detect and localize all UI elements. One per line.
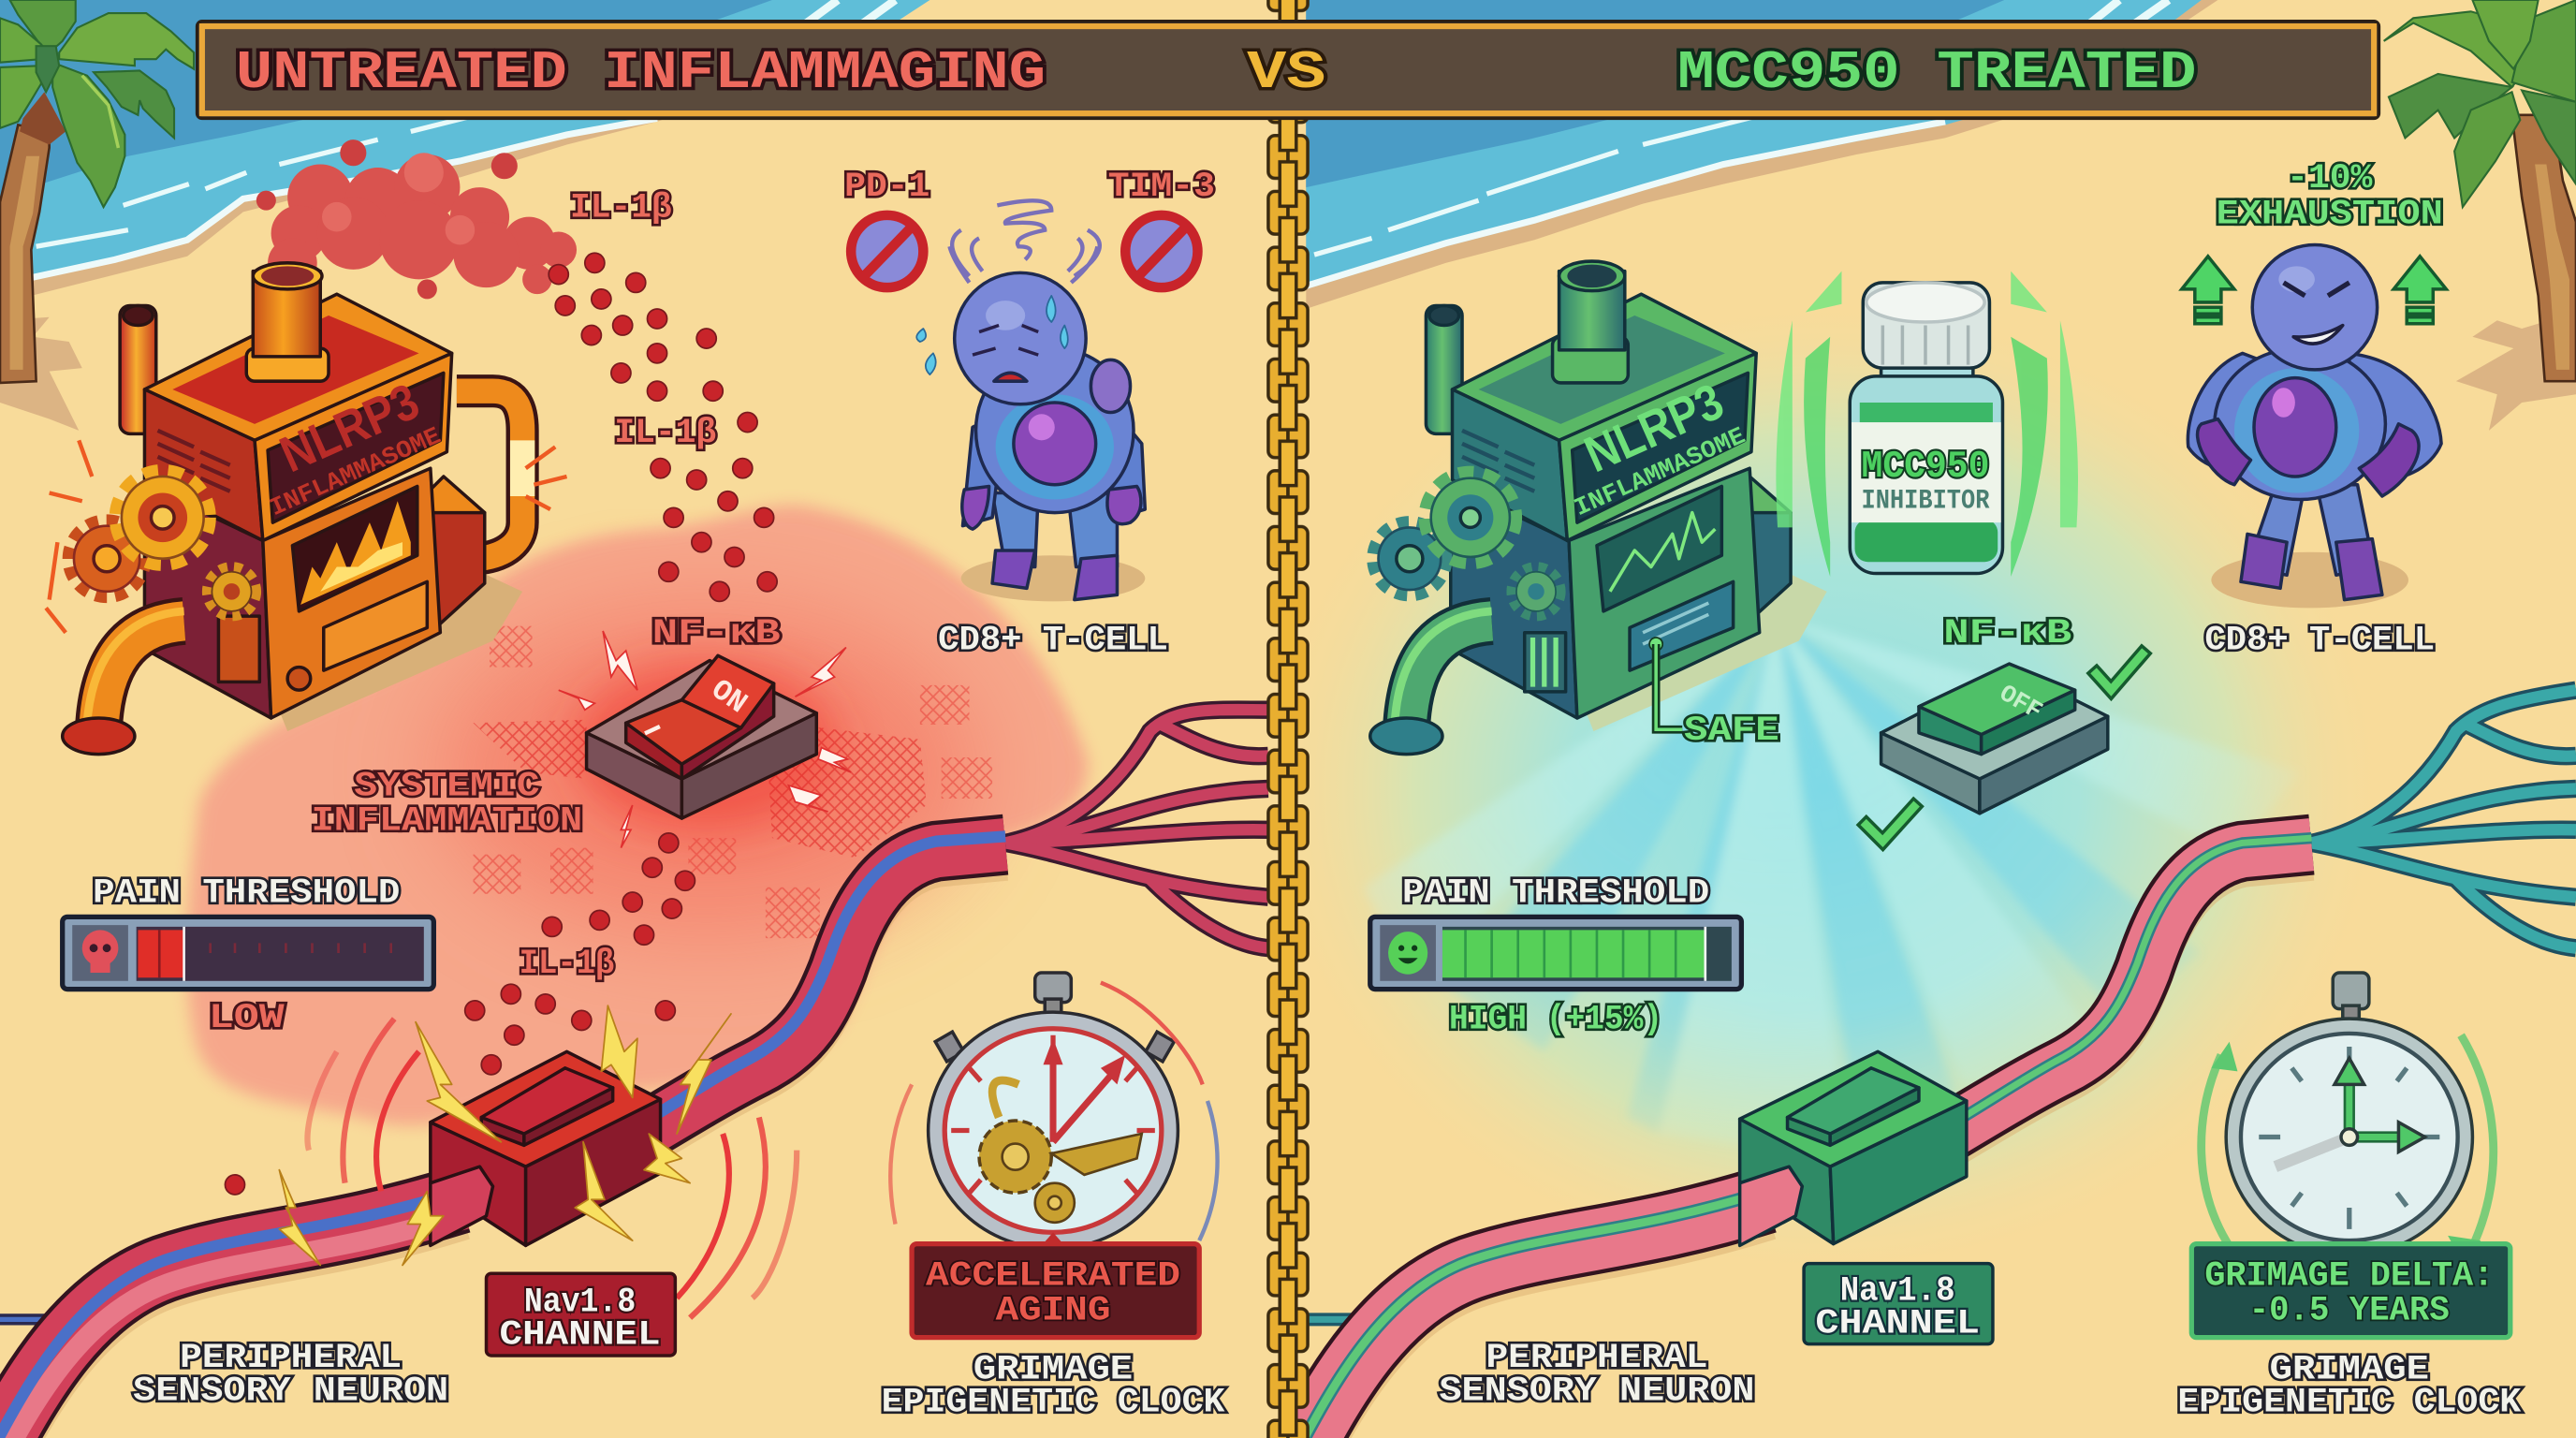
channel: Nav1.8 right	[1740, 1051, 1967, 1245]
machine: NLRP3 inflammasome treated	[1370, 261, 1827, 755]
smiling face	[2284, 283, 2349, 296]
IL-1β particles	[225, 253, 777, 1195]
label: peripheral sensory neuron right	[1439, 1339, 1754, 1411]
label: NF-κB on: NF-κB	[652, 614, 781, 653]
gears	[69, 472, 256, 616]
neuron: right	[1296, 690, 2576, 1438]
label: peripheral sensory neuron left: PERIPHERAL	[180, 1339, 402, 1378]
axon branches	[1005, 710, 1268, 948]
switch: NF-κB OFF	[1881, 664, 2108, 814]
channel: Nav1.8 left	[279, 1005, 797, 1318]
palm tree: left	[0, 0, 194, 431]
label: Nav1.8 channel left: CHANNEL	[500, 1316, 661, 1356]
ocean: right	[1306, 0, 2217, 309]
chimney	[246, 263, 329, 381]
label: systemic inflammation	[312, 767, 582, 841]
chimney	[1553, 261, 1628, 383]
icon: dizzy swirl	[949, 200, 1100, 283]
bar: pain threshold low	[63, 917, 433, 990]
label: pain threshold right: PAIN THRESHOLD	[1402, 874, 1709, 914]
sparks	[46, 440, 567, 633]
bottle label text: INHIBITOR	[1862, 484, 1990, 516]
label: PD-1: PD-1	[844, 168, 929, 207]
icon: TIM-3 blocked receptor	[1125, 215, 1197, 287]
label: IL-1β top: IL-1β	[570, 189, 672, 228]
callout: GrimAge delta: GRIMAGE DELTA:	[2204, 1256, 2494, 1296]
gears	[1373, 473, 1560, 616]
label: GrimAge clock left: EPIGENETIC CLOCK	[882, 1384, 1225, 1423]
icon: PD-1 blocked receptor	[851, 215, 923, 287]
chain divider	[1266, 0, 1310, 1438]
callout: accelerated aging	[912, 1232, 1199, 1338]
label: GrimAge clock left: GRIMAGE	[973, 1351, 1133, 1390]
pipe: lower elbow	[87, 611, 184, 731]
label: exhaustion reduction: -10%	[2287, 159, 2373, 198]
vibration arcs	[308, 1019, 797, 1318]
callout: accelerated aging: AGING	[996, 1291, 1110, 1330]
clock hands	[1053, 1051, 1117, 1142]
label: exhaustion reduction: EXHAUSTION	[2217, 196, 2443, 235]
rotation arrows	[2202, 1035, 2494, 1257]
label: GrimAge clock right: EPIGENETIC CLOCK	[2177, 1384, 2522, 1423]
label: GrimAge clock right	[2177, 1351, 2522, 1423]
switch: NF-κB ON	[587, 655, 816, 818]
bottle: MCC950 inhibitor	[1850, 283, 2002, 574]
title: untreated: UNTREATED INFLAMMAGING	[236, 43, 1046, 104]
label: TIM-3: TIM-3	[1108, 168, 1215, 207]
switch label: ON: ON	[705, 674, 753, 721]
label: Nav1.8 channel right	[1804, 1264, 1993, 1344]
palm tree: right	[2384, 0, 2576, 431]
SAFE callout	[1649, 638, 1779, 751]
label: CD8+ T-cell left: CD8+ T-CELL	[938, 621, 1168, 660]
panel: systemic inflammation haze	[186, 506, 1088, 1125]
display: NLRP3 label: NLRP3	[1576, 373, 1732, 483]
pipe: right coupling	[457, 391, 522, 559]
label: peripheral sensory neuron right: SENSORY NEURON	[1439, 1372, 1754, 1411]
label: exhaustion reduction	[2217, 159, 2443, 235]
SAFE callout: SAFE	[1684, 712, 1779, 751]
pipe: lower elbow	[1395, 611, 1492, 731]
title: VS: VS	[1247, 43, 1325, 104]
icon: check marks	[1866, 654, 2143, 842]
icon: strength arrows	[2182, 257, 2446, 324]
smoke cloud: IL-1β plume	[256, 139, 577, 299]
label: GrimAge clock right: GRIMAGE	[2270, 1351, 2429, 1390]
clock hands	[2349, 1071, 2408, 1137]
title banner	[198, 22, 2378, 118]
label: peripheral sensory neuron left	[133, 1339, 448, 1411]
neuron stub into box	[1740, 1167, 1802, 1245]
neuron stub into box	[431, 1167, 493, 1245]
icon: smile face	[1388, 932, 1427, 975]
ocean: left	[0, 0, 929, 320]
vents	[157, 431, 230, 492]
callout: accelerated aging: ACCELERATED	[926, 1256, 1180, 1296]
display: NLRP3 label: INFLAMMASOME	[266, 422, 446, 522]
crosshatch patches	[473, 626, 992, 938]
switch label: OFF: OFF	[1995, 680, 2047, 726]
side box	[431, 490, 485, 633]
callout: GrimAge delta: -0.5 YEARS	[2249, 1291, 2450, 1330]
label: IL-1β lower: IL-1β	[520, 945, 614, 984]
label: Nav1.8 channel right: CHANNEL	[1815, 1304, 1980, 1343]
clock: accelerated aging	[890, 973, 1218, 1249]
sweat drops	[916, 296, 1068, 374]
machine: NLRP3 inflammasome untreated	[46, 263, 567, 755]
label: CD8+ T-cell right: CD8+ T-CELL	[2204, 621, 2435, 660]
icon: skull	[82, 930, 118, 973]
label: peripheral sensory neuron right: PERIPHERAL	[1486, 1339, 1707, 1378]
clock gears	[979, 1080, 1142, 1223]
label: Nav1.8 channel right: Nav1.8	[1840, 1271, 1955, 1311]
label: systemic inflammation: INFLAMMATION	[312, 801, 582, 841]
T-cell: strong	[2188, 245, 2441, 608]
label: GrimAge clock left	[882, 1351, 1225, 1423]
label: LOW: LOW	[209, 999, 285, 1038]
bar: pain threshold high	[1370, 917, 1741, 990]
icon: MCC950 shield brackets	[1776, 271, 2078, 577]
monitor: heart trace	[1597, 487, 1721, 611]
bottle label text	[1862, 446, 1990, 516]
label: Nav1.8 channel left	[487, 1273, 675, 1356]
title: treated: MCC950 TREATED	[1677, 43, 2197, 104]
pipe: thin left	[120, 305, 156, 433]
lightning around switch	[559, 631, 851, 848]
sad face	[973, 326, 1038, 355]
lightning	[279, 1005, 731, 1265]
label: systemic inflammation: SYSTEMIC	[354, 767, 540, 806]
display: NLRP3 label	[1570, 373, 1749, 522]
motion arcs	[890, 983, 1218, 1240]
label: IL-1β middle: IL-1β	[614, 414, 716, 453]
label: peripheral sensory neuron left: SENSORY NEURON	[133, 1372, 448, 1411]
display: NLRP3 label: NLRP3	[271, 373, 427, 483]
label: NF-κB off: NF-κB	[1943, 614, 2071, 653]
display: NLRP3 label: INFLAMMASOME	[1570, 422, 1749, 522]
fire window	[292, 487, 417, 611]
T-cell: exhausted	[916, 272, 1145, 601]
label: pain threshold left: PAIN THRESHOLD	[93, 874, 400, 914]
axon branches	[2311, 690, 2576, 948]
callout: GrimAge delta	[2191, 1244, 2510, 1338]
label: Nav1.8 channel left: Nav1.8	[524, 1284, 636, 1323]
display: NLRP3 label	[266, 373, 446, 522]
bottle label text: MCC950	[1862, 446, 1989, 489]
clock: GrimAge delta	[2202, 973, 2494, 1265]
neuron: left	[0, 710, 1268, 1438]
label: HIGH +15%: HIGH (+15%)	[1449, 1001, 1662, 1040]
panel: healing light rays	[1257, 296, 2391, 1282]
